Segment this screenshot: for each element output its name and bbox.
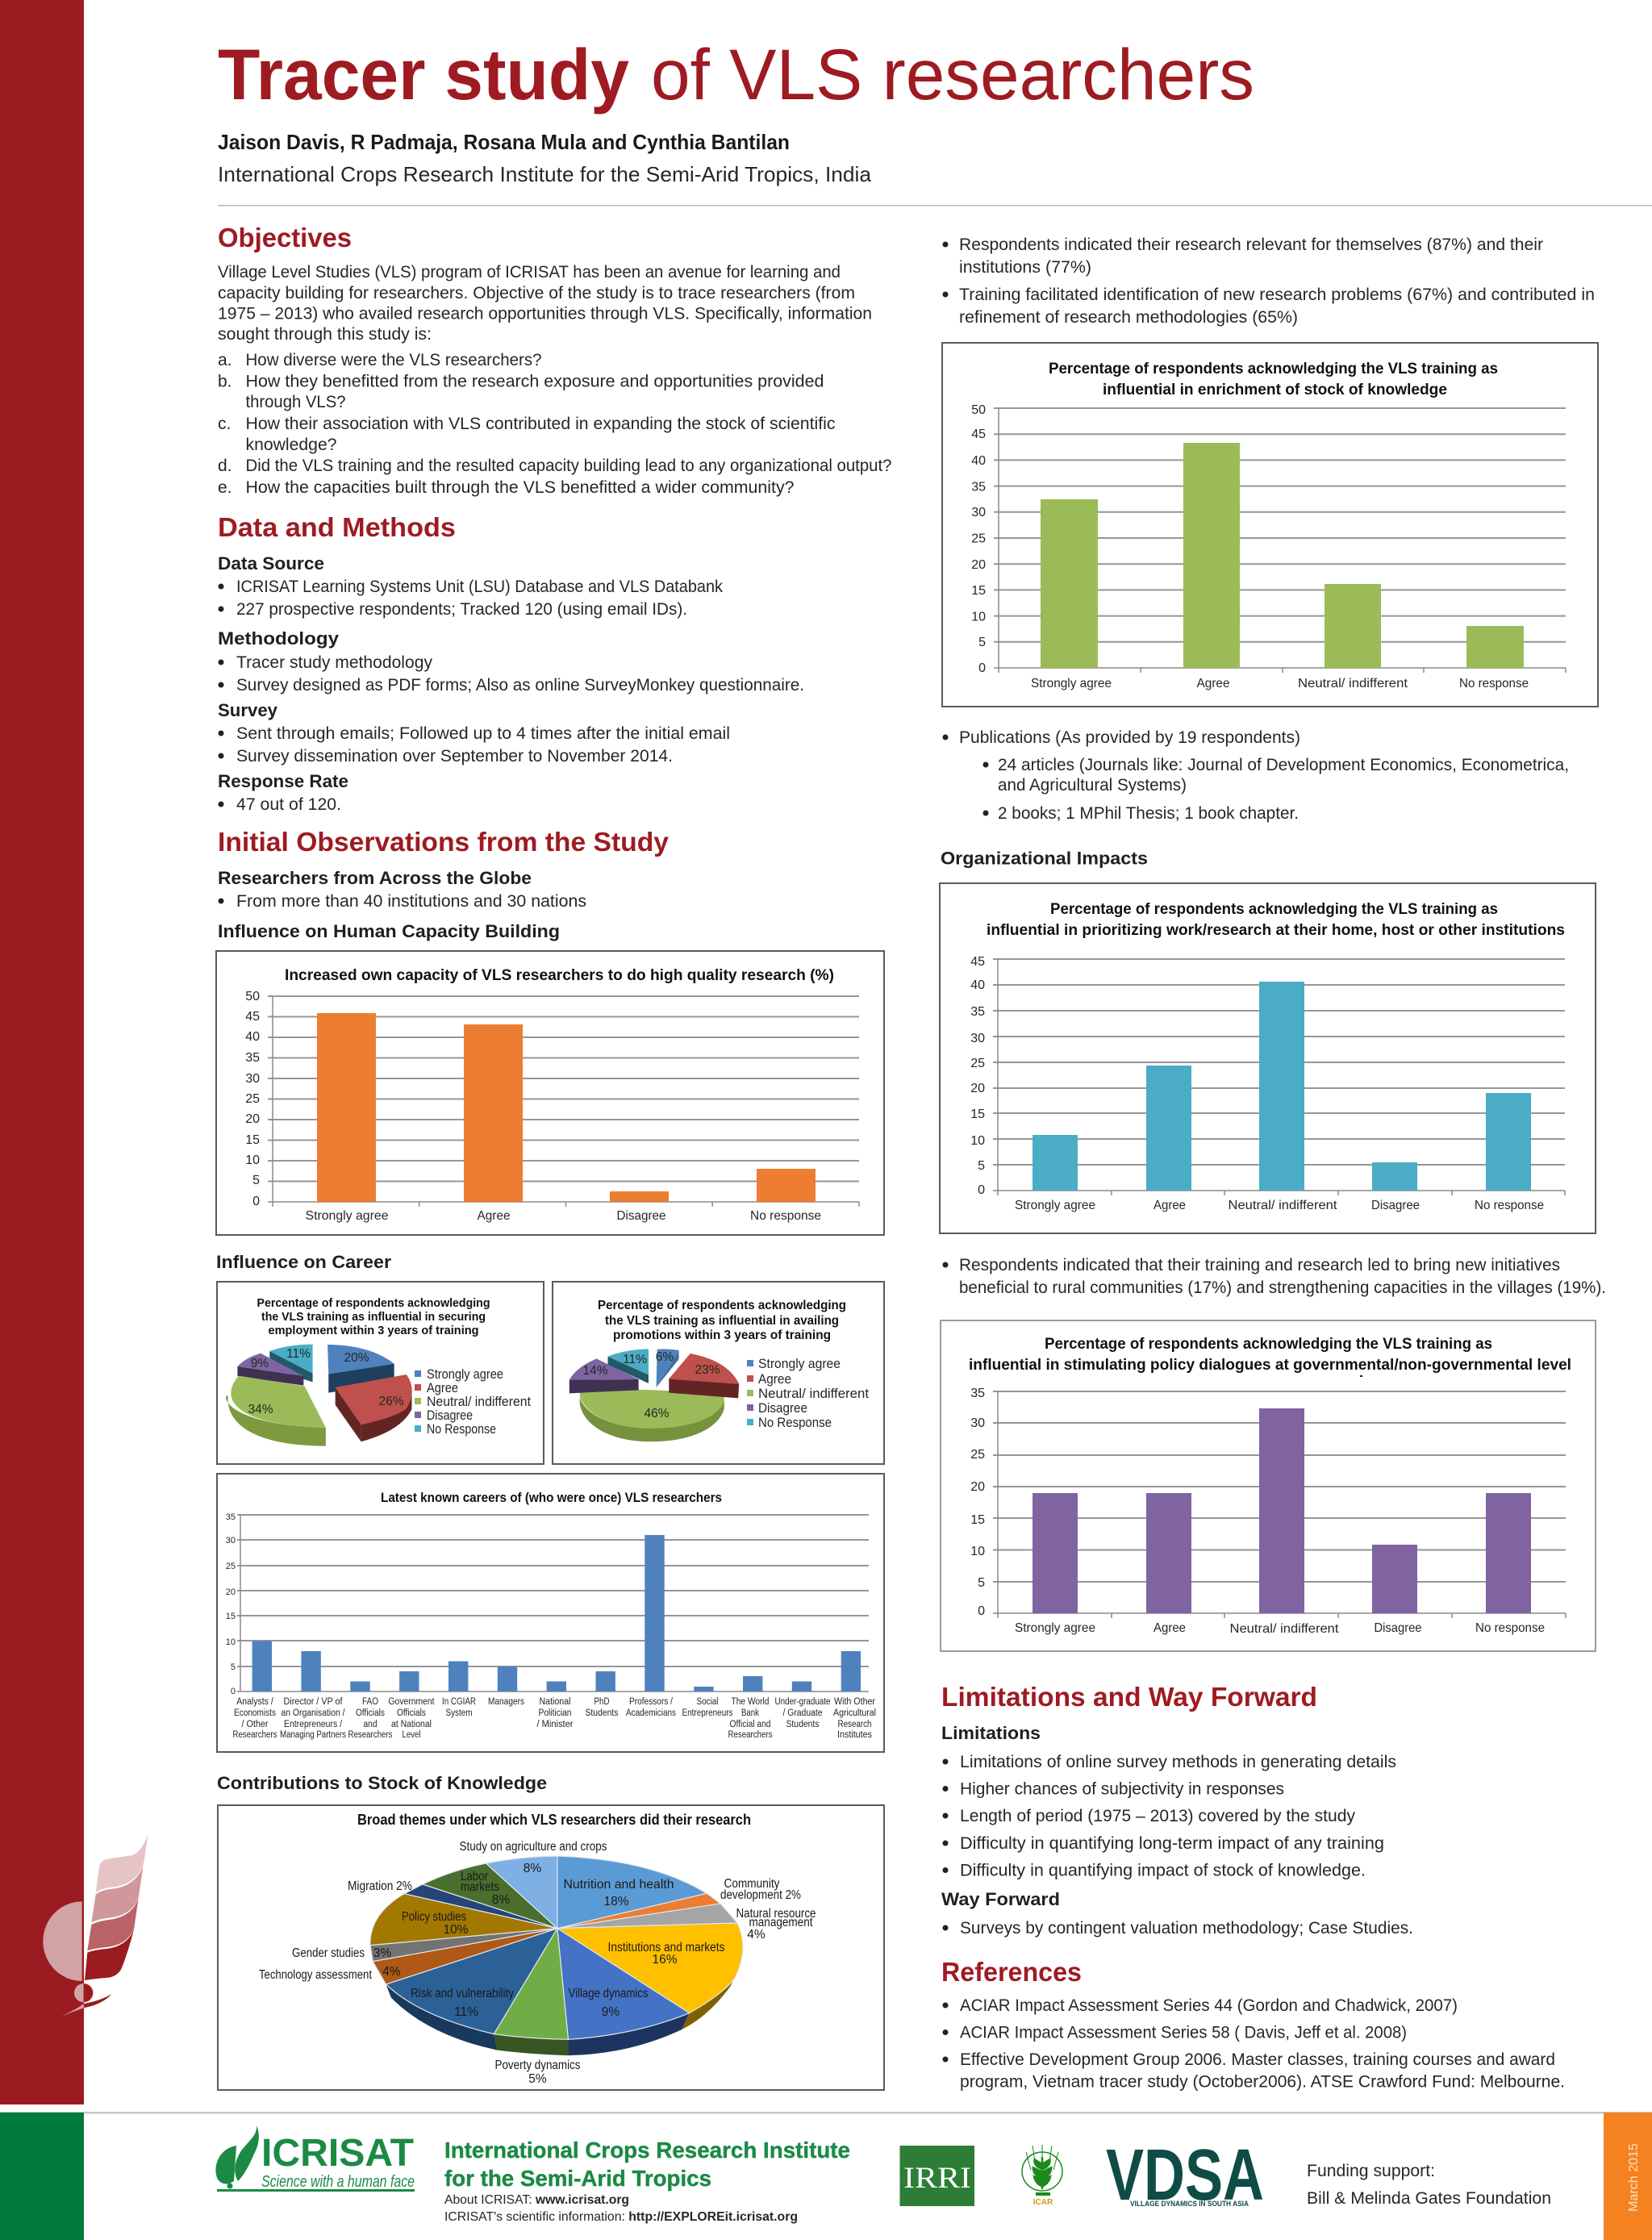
- text block: publications: and Agricultural Systems): [998, 776, 1187, 795]
- bar chart: enrichment of stock of knowledge: No response: [1459, 677, 1529, 690]
- text block: ICRISAT name and links: International Crops Research Institute: [444, 2138, 850, 2163]
- pie chart: broad themes: 8%: [524, 1862, 541, 1875]
- bar chart: latest known careers: and: [363, 1720, 378, 1729]
- pie chart: broad themes: markets: [461, 1880, 499, 1894]
- text block: survey: [218, 700, 730, 765]
- text block: objectives: How their association with VLS contributed in expanding the stock of scientific: [245, 415, 836, 433]
- logo: IRRI: IRRI: [903, 2162, 971, 2195]
- pie chart: broad themes: 9%: [602, 2005, 620, 2019]
- bar chart: prioritizing work and research: Disagree: [1371, 1199, 1420, 1212]
- text block: funding support: [1307, 2162, 1551, 2208]
- text block: references: [942, 1996, 1565, 2091]
- bar chart: increased own capacity: No response: [750, 1209, 821, 1223]
- text block: objectives: e.: [218, 478, 232, 497]
- bar chart: stimulating policy dialogues: 15: [970, 1513, 985, 1527]
- text block: methodology: [218, 628, 804, 695]
- bar chart: latest known careers: Researchers: [348, 1730, 393, 1740]
- bar chart: increased own capacity: Increased own capacity of VLS researchers to do high quality research (%): [285, 966, 834, 984]
- text block: survey: Sent through emails; Followed up to 4 times after the initial email: [236, 724, 730, 743]
- pie chart: securing employment: the VLS training as influential in securing: [261, 1310, 486, 1324]
- bar chart: stimulating policy dialogues: 20: [970, 1480, 985, 1494]
- bar chart: enrichment of stock of knowledge: 10: [971, 610, 986, 624]
- heading: References: References: [941, 1957, 1082, 1987]
- bar chart: latest known careers: at National: [391, 1720, 432, 1729]
- bar chart: stimulating policy dialogues: No response: [1475, 1621, 1545, 1635]
- pie chart: availing promotions: Neutral/ indifferent: [758, 1386, 869, 1401]
- text block: objectives: d.: [218, 457, 232, 475]
- pie chart: securing employment: 20%: [344, 1351, 369, 1365]
- bar chart: increased own capacity: Disagree: [616, 1209, 666, 1223]
- bar chart: stimulating policy dialogues: 5: [978, 1576, 985, 1590]
- pie chart: securing employment: 34%: [248, 1403, 273, 1416]
- pie chart: broad themes: Village dynamics: [568, 1987, 649, 2000]
- text block: limitations: Higher chances of subjectivity in responses: [960, 1779, 1284, 1799]
- date label: March 2015: [1627, 2143, 1641, 2212]
- pie chart: availing promotions: the VLS training as influential in availing: [605, 1314, 839, 1328]
- pie chart: availing promotions: 14%: [582, 1364, 608, 1378]
- text block: survey: Survey: [218, 700, 277, 720]
- text block: relevance and training bullets: Respondents indicated their research relevant for themselves (87%) and their: [959, 236, 1543, 254]
- bar chart: increased own capacity: 0: [252, 1195, 260, 1208]
- bar chart: prioritizing work and research: 40: [970, 978, 985, 992]
- text block: relevance and training bullets: refinement of research methodologies (65%): [959, 308, 1298, 327]
- pie chart: broad themes: Natural resource: [736, 1907, 816, 1921]
- text block: methodology: Methodology: [218, 628, 340, 649]
- bar chart: prioritizing work and research: Agree: [1153, 1199, 1186, 1212]
- bar chart: latest known careers: FAO: [362, 1697, 378, 1707]
- text block: ICRISAT name and links: [444, 2138, 850, 2224]
- bar chart: latest known careers: PhD: [594, 1697, 610, 1707]
- text block: way forward: Way Forward: [941, 1889, 1060, 1909]
- heading: Initial Observations from the Study: Initial Observations from the Study: [218, 827, 670, 857]
- pie chart: broad themes: Policy studies: [402, 1910, 466, 1924]
- bar chart: prioritizing work and research: 10: [970, 1134, 985, 1148]
- pie chart: availing promotions: Agree: [758, 1371, 791, 1387]
- text block: new initiatives bullet: [942, 1256, 1606, 1297]
- bar chart: latest known careers: 10: [226, 1637, 236, 1647]
- pie chart: broad themes: development 2%: [720, 1888, 801, 1902]
- pie chart: availing promotions: Percentage of respondents acknowledging: [598, 1299, 846, 1312]
- text block: limitations: Difficulty in quantifying impact of stock of knowledge.: [960, 1862, 1366, 1879]
- bar chart: prioritizing work and research: Percentage of respondents acknowledging the VLS training as: [1050, 900, 1498, 918]
- bar chart: stimulating policy dialogues: 25: [970, 1448, 985, 1462]
- text block: publications: 24 articles (Journals like: Journal of Development Economics, Econometrica,: [998, 756, 1569, 774]
- text block: researchers from across the globe: Researchers from Across the Globe: [218, 868, 532, 888]
- text block: limitations: Difficulty in quantifying long-term impact of any training: [960, 1834, 1384, 1853]
- bar chart: latest known careers: 30: [226, 1536, 236, 1545]
- text block: data source: Data Source: [218, 553, 324, 574]
- text block: ICRISAT name and links: for the Semi-Arid Tropics: [444, 2166, 711, 2191]
- text block: objectives: b.: [218, 373, 232, 390]
- text block: objectives: a.: [218, 351, 232, 369]
- text block: data source: [218, 553, 723, 619]
- text block: objectives: [218, 263, 892, 497]
- pie chart: securing employment: Disagree: [427, 1408, 473, 1423]
- bar chart: latest known careers: 35: [226, 1512, 236, 1522]
- heading: Data and Methods: Data and Methods: [218, 512, 456, 542]
- bar chart: latest known careers: Students: [586, 1708, 619, 1718]
- bar chart: latest known careers: [217, 1474, 884, 1752]
- heading: Influence on Human Capacity Building: Influence on Human Capacity Building: [218, 921, 560, 941]
- heading: Limitations and Way Forward: Limitations and Way Forward: [941, 1682, 1317, 1712]
- bar chart: enrichment of stock of knowledge: Percentage of respondents acknowledging the VLS training as: [1049, 360, 1498, 378]
- pie chart: broad themes: Risk and vulnerability: [411, 1987, 514, 2000]
- authors and affiliation: [218, 130, 872, 186]
- bar chart: latest known careers: Research: [837, 1720, 871, 1729]
- text block: objectives: How they benefitted from the research exposure and opportunities provided: [245, 373, 824, 390]
- pie chart: availing promotions: No Response: [758, 1415, 832, 1430]
- text block: relevance and training bullets: [942, 236, 1595, 327]
- bar chart: enrichment of stock of knowledge: 35: [971, 481, 986, 494]
- bar chart: latest known careers: Official and: [729, 1720, 771, 1729]
- bar chart: enrichment of stock of knowledge: 5: [978, 636, 986, 649]
- pie chart: securing employment: Percentage of respondents acknowledging: [257, 1296, 490, 1310]
- bar chart: prioritizing work and research: 25: [970, 1057, 985, 1070]
- authors and affiliation: International Crops Research Institute for the Semi-Arid Tropics, India: [218, 162, 872, 186]
- heading: Influence on Career: Influence on Career: [216, 1252, 391, 1272]
- pie chart: broad themes: Nutrition and health: [563, 1878, 674, 1892]
- heading: Contributions to Stock of Knowledge: Contributions to Stock of Knowledge: [217, 1773, 547, 1793]
- icon: ICRISAT wheat emblem on sidebar: [43, 1835, 148, 2021]
- bar chart: enrichment of stock of knowledge: 40: [971, 454, 986, 468]
- footer divider and colour blocks: [0, 2112, 1652, 2240]
- bar chart: stimulating policy dialogues: 10: [970, 1545, 985, 1558]
- bar chart: latest known careers: Government: [389, 1697, 435, 1707]
- pie chart: broad themes: Community: [724, 1877, 780, 1891]
- bar chart: latest known careers: Researchers: [728, 1730, 773, 1740]
- text block: funding support: Bill & Melinda Gates Foundation: [1307, 2189, 1551, 2208]
- title: of VLS researchers: [651, 34, 1254, 115]
- bar chart: latest known careers: Analysts /: [236, 1697, 273, 1707]
- pie chart: broad themes: 10%: [443, 1923, 469, 1937]
- text block: objectives: How diverse were the VLS researchers?: [245, 351, 542, 369]
- heading: Organizational Impacts: Organizational Impacts: [941, 849, 1148, 868]
- text block: objectives: sought through this study is:: [218, 325, 432, 344]
- bar chart: enrichment of stock of knowledge: 25: [971, 532, 986, 545]
- pie chart: broad themes: 11%: [454, 2005, 478, 2019]
- pie chart: availing promotions: 46%: [644, 1407, 670, 1420]
- bar chart: enrichment of stock of knowledge: 15: [971, 584, 986, 598]
- bar chart: enrichment of stock of knowledge: Strongly agree: [1031, 677, 1112, 690]
- pie chart: securing employment: 26%: [378, 1395, 404, 1408]
- bar chart: prioritizing work and research: [940, 883, 1596, 1233]
- bar chart: latest known careers: The World: [731, 1697, 770, 1707]
- bar chart: latest known careers: / Graduate: [782, 1708, 823, 1718]
- bar chart: latest known careers: Students: [786, 1720, 820, 1729]
- logo: VDSA: VILLAGE DYNAMICS IN SOUTH ASIA: [1130, 2200, 1249, 2209]
- bar chart: latest known careers: 0: [231, 1687, 236, 1696]
- pie chart: broad themes: Gender studies: [292, 1946, 365, 1960]
- bar chart: latest known careers: Entrepreneurs: [682, 1708, 733, 1718]
- text block: funding support: Funding support:: [1307, 2162, 1435, 2180]
- authors and affiliation: Jaison Davis, R Padmaja, Rosana Mula and Cynthia Bantilan: [218, 130, 790, 154]
- pie chart: securing employment: 11%: [286, 1347, 311, 1361]
- bar chart: increased own capacity: 5: [252, 1174, 260, 1187]
- bar chart: latest known careers: 20: [226, 1587, 236, 1597]
- bar chart: enrichment of stock of knowledge: 20: [971, 558, 986, 572]
- pie chart: availing promotions: 6%: [656, 1350, 674, 1364]
- logo: ICAR: [1022, 2145, 1062, 2207]
- bar chart: latest known careers: With Other: [834, 1697, 875, 1707]
- pie chart: broad themes: Study on agriculture and crops: [460, 1840, 607, 1854]
- bar chart: enrichment of stock of knowledge: 45: [971, 428, 986, 441]
- bar chart: prioritizing work and research: 35: [970, 1005, 985, 1019]
- bar chart: enrichment of stock of knowledge: Agree: [1197, 677, 1230, 690]
- bar chart: latest known careers: 25: [226, 1562, 236, 1571]
- heading: Objectives: Objectives: [218, 223, 352, 252]
- pie chart: securing employment: Strongly agree: [427, 1366, 503, 1382]
- pie chart: broad themes: 8%: [492, 1893, 510, 1907]
- bar chart: increased own capacity: 15: [245, 1133, 260, 1147]
- bar chart: latest known careers: Officials: [356, 1708, 385, 1718]
- text block: limitations: Length of period (1975 – 2013) covered by the study: [960, 1807, 1355, 1825]
- text block: way forward: Surveys by contingent valuation methodology; Case Studies.: [960, 1919, 1413, 1938]
- pie chart: securing employment: Neutral/ indifferent: [427, 1394, 531, 1409]
- bar chart: enrichment of stock of knowledge: 0: [978, 661, 986, 675]
- text block: methodology: Survey designed as PDF forms; Also as online SurveyMonkey questionnaire.: [236, 676, 804, 695]
- text block: limitations: Limitations: [941, 1723, 1041, 1743]
- bar chart: prioritizing work and research: 5: [978, 1159, 985, 1173]
- bar chart: latest known careers: an Organisation /: [281, 1708, 345, 1718]
- bar chart: increased own capacity: [216, 951, 884, 1235]
- bar chart: stimulating policy dialogues: 30: [970, 1416, 985, 1430]
- bar chart: stimulating policy dialogues: [941, 1320, 1596, 1651]
- logo: ICRISAT: ICRISAT: [261, 2132, 414, 2175]
- bar chart: enrichment of stock of knowledge: Neutral/ indifferent: [1298, 677, 1408, 690]
- bar chart: latest known careers: Professors /: [629, 1697, 674, 1707]
- text block: new initiatives bullet: Respondents indicated that their training and research led to bring new initiatives: [959, 1256, 1560, 1274]
- text block: new initiatives bullet: beneficial to rural communities (17%) and strengthening capacities in the villages (19%).: [959, 1279, 1606, 1297]
- bar chart: stimulating policy dialogues: Strongly agree: [1015, 1621, 1095, 1635]
- pie chart: broad themes: 4%: [747, 1928, 766, 1942]
- bar chart: latest known careers: Academicians: [626, 1708, 676, 1718]
- pie chart: broad themes: 5%: [528, 2072, 547, 2086]
- bar chart: increased own capacity: 45: [245, 1010, 260, 1024]
- bar chart: latest known careers: 15: [226, 1612, 236, 1621]
- title: [218, 34, 1254, 115]
- text block: publications: Publications (As provided by 19 respondents): [959, 728, 1300, 747]
- bar chart: latest known careers: Level: [402, 1730, 421, 1740]
- text block: publications: 2 books; 1 MPhil Thesis; 1 book chapter.: [998, 804, 1299, 823]
- bar chart: latest known careers: Managers: [488, 1697, 524, 1707]
- pie chart: availing promotions: promotions within 3 years of training: [613, 1329, 831, 1342]
- bar chart: latest known careers: / Minister: [537, 1720, 574, 1729]
- pie chart: broad themes: 16%: [652, 1953, 678, 1967]
- bar chart: enrichment of stock of knowledge: 50: [971, 403, 986, 417]
- text block: objectives: knowledge?: [245, 436, 337, 454]
- text block: references: Effective Development Group 2006. Master classes, training courses and award: [960, 2050, 1555, 2069]
- bar chart: latest known careers: Officials: [397, 1708, 426, 1718]
- bar chart: prioritizing work and research: 0: [978, 1183, 985, 1197]
- bar chart: enrichment of stock of knowledge: 30: [971, 506, 986, 519]
- pie chart: securing employment: employment within 3 years of training: [268, 1324, 479, 1337]
- pie chart: securing employment: No Response: [427, 1421, 496, 1437]
- bar chart: increased own capacity: Strongly agree: [305, 1209, 389, 1223]
- pie chart: broad themes: 18%: [603, 1895, 629, 1908]
- bar chart: latest known careers: Director / VP of: [284, 1697, 343, 1707]
- text block: objectives: Did the VLS training and the resulted capacity building lead to any organizational output?: [245, 457, 892, 475]
- bar chart: stimulating policy dialogues: 0: [978, 1604, 985, 1618]
- pie chart: securing employment: 9%: [251, 1357, 269, 1370]
- bar chart: prioritizing work and research: 45: [970, 955, 985, 969]
- bar chart: stimulating policy dialogues: Disagree: [1375, 1621, 1422, 1635]
- text block: objectives: 1975 – 2013) who availed research opportunities through VLS. Specifically, information: [218, 305, 872, 323]
- text block: objectives: Village Level Studies (VLS) program of ICRISAT has been an avenue for learning and: [218, 263, 841, 282]
- bar chart: prioritizing work and research: 20: [970, 1082, 985, 1095]
- bar chart: latest known careers: / Other: [242, 1720, 269, 1729]
- bar chart: stimulating policy dialogues: Percentage of respondents acknowledging the VLS training as: [1045, 1335, 1492, 1353]
- bar chart: latest known careers: 5: [231, 1662, 236, 1672]
- bar chart: increased own capacity: Agree: [478, 1209, 511, 1223]
- text block: objectives: c.: [218, 415, 231, 433]
- pie chart: broad themes: Migration 2%: [348, 1879, 412, 1893]
- bar chart: prioritizing work and research: No response: [1475, 1199, 1544, 1212]
- text block: objectives: through VLS?: [245, 393, 345, 411]
- bar chart: increased own capacity: 50: [245, 990, 260, 1003]
- bar chart: latest known careers: Latest known careers of (who were once) VLS researchers: [381, 1490, 722, 1505]
- text block: ICRISAT name and links: About ICRISAT: www.icrisat.org: [444, 2193, 629, 2207]
- bar chart: stimulating policy dialogues: Agree: [1153, 1621, 1186, 1635]
- text block: response rate: Response Rate: [218, 771, 348, 791]
- logo: ICRISAT: [215, 2125, 415, 2192]
- text block: limitations: [941, 1723, 1396, 1879]
- bar chart: stimulating policy dialogues: 35: [970, 1387, 985, 1400]
- pie chart: securing employment: Agree: [427, 1380, 458, 1395]
- pie chart: broad themes: Institutions and markets: [608, 1941, 725, 1954]
- bar chart: latest known careers: Researchers: [232, 1730, 277, 1740]
- text block: limitations: Limitations of online survey methods in generating details: [960, 1753, 1396, 1771]
- title: Tracer study: [218, 34, 629, 115]
- bar chart: increased own capacity: 10: [245, 1153, 260, 1167]
- text block: response rate: [218, 771, 348, 814]
- pie chart: broad themes: Technology assessment: [259, 1968, 373, 1982]
- text block: way forward: [941, 1889, 1413, 1938]
- pie chart: availing promotions: Strongly agree: [758, 1356, 841, 1371]
- text block: data source: 227 prospective respondents; Tracked 120 (using email IDs).: [236, 600, 687, 619]
- bar chart: latest known careers: Economists: [234, 1708, 276, 1718]
- bar chart: increased own capacity: 35: [245, 1051, 260, 1065]
- bar chart: latest known careers: Institutes: [837, 1730, 872, 1740]
- bar chart: latest known careers: National: [539, 1697, 571, 1707]
- logo: IRRI: [900, 2146, 974, 2206]
- text block: survey: Survey dissemination over September to November 2014.: [236, 747, 673, 765]
- left red sidebar: [0, 0, 84, 2104]
- bar chart: increased own capacity: 20: [245, 1112, 260, 1126]
- text block: publications: [942, 728, 1569, 823]
- pie chart: broad themes: Poverty dynamics: [495, 2059, 581, 2072]
- text block: methodology: Tracer study methodology: [236, 653, 432, 672]
- bar chart: latest known careers: Bank: [741, 1708, 759, 1718]
- bar chart: prioritizing work and research: Neutral/ indifferent: [1228, 1199, 1337, 1212]
- text block: data source: ICRISAT Learning Systems Unit (LSU) Database and VLS Databank: [236, 578, 723, 596]
- text block: ICRISAT name and links: ICRISAT's scientific information: http://EXPLOREit.icrisat.org: [444, 2210, 798, 2224]
- text block: response rate: 47 out of 120.: [236, 795, 341, 814]
- pie chart: availing promotions: Disagree: [758, 1400, 807, 1416]
- text block: relevance and training bullets: Training facilitated identification of new research problems (67%) and contributed in: [959, 286, 1595, 304]
- pie chart: availing promotions: 23%: [695, 1363, 720, 1377]
- bar chart: latest known careers: Agricultural: [833, 1708, 876, 1718]
- bar chart: prioritizing work and research: 15: [970, 1107, 985, 1121]
- text block: objectives: How the capacities built through the VLS benefitted a wider community?: [245, 478, 794, 497]
- pie chart: broad themes: 3%: [373, 1946, 391, 1960]
- bar chart: latest known careers: In CGIAR: [442, 1697, 476, 1707]
- bar chart: enrichment of stock of knowledge: [942, 343, 1598, 707]
- pie chart: broad themes: Labor: [461, 1870, 488, 1883]
- bar chart: latest known careers: Politician: [539, 1708, 571, 1718]
- bar chart: stimulating policy dialogues: Neutral/ indifferent: [1229, 1622, 1339, 1636]
- pie chart: broad themes: [218, 1805, 884, 2090]
- logo: VDSA: VDSA: [1106, 2135, 1264, 2216]
- bar chart: latest known careers: Managing Partners: [280, 1730, 346, 1740]
- pie chart: availing promotions: 11%: [623, 1353, 647, 1366]
- logo: ICAR: ICAR: [1033, 2198, 1053, 2207]
- bar chart: enrichment of stock of knowledge: influential in enrichment of stock of knowledge: [1103, 381, 1447, 398]
- bar chart: prioritizing work and research: influential in prioritizing work/research at their home, host or other institutions: [987, 921, 1565, 939]
- pie chart: availing promotions: [553, 1282, 884, 1464]
- text block: researchers from across the globe: From more than 40 institutions and 30 nations: [236, 892, 586, 911]
- bar chart: latest known careers: Under-graduate: [774, 1697, 831, 1707]
- bar chart: increased own capacity: 25: [245, 1092, 260, 1106]
- bar chart: prioritizing work and research: 30: [970, 1032, 985, 1045]
- text block: references: ACIAR Impact Assessment Series 58 ( Davis, Jeff et al. 2008): [960, 2023, 1407, 2042]
- bar chart: prioritizing work and research: Strongly agree: [1015, 1199, 1095, 1212]
- bar chart: increased own capacity: 40: [245, 1030, 260, 1044]
- text block: researchers from across the globe: [218, 868, 586, 911]
- bar chart: latest known careers: Social: [697, 1697, 718, 1707]
- bar chart: latest known careers: System: [445, 1708, 473, 1718]
- pie chart: broad themes: Broad themes under which VLS researchers did their research: [357, 1812, 751, 1828]
- text block: references: program, Vietnam tracer study (October2006). ATSE Crawford Fund: Melbourne.: [960, 2073, 1565, 2091]
- bar chart: stimulating policy dialogues: influential in stimulating policy dialogues at governmental/non-governmental level: [969, 1356, 1571, 1374]
- text block: relevance and training bullets: institutions (77%): [959, 258, 1091, 277]
- text block: references: ACIAR Impact Assessment Series 44 (Gordon and Chadwick, 2007): [960, 1996, 1458, 2015]
- logo: ICRISAT: Science with a human face: [261, 2173, 415, 2191]
- bar chart: increased own capacity: 30: [245, 1072, 260, 1086]
- bar chart: latest known careers: Entrepreneurs /: [284, 1720, 343, 1729]
- text block: objectives: capacity building for researchers. Objective of the study is to trace researchers (from: [218, 284, 855, 302]
- pie chart: broad themes: 4%: [382, 1965, 401, 1979]
- pie chart: securing employment: [217, 1282, 544, 1464]
- pie chart: broad themes: management: [749, 1916, 813, 1929]
